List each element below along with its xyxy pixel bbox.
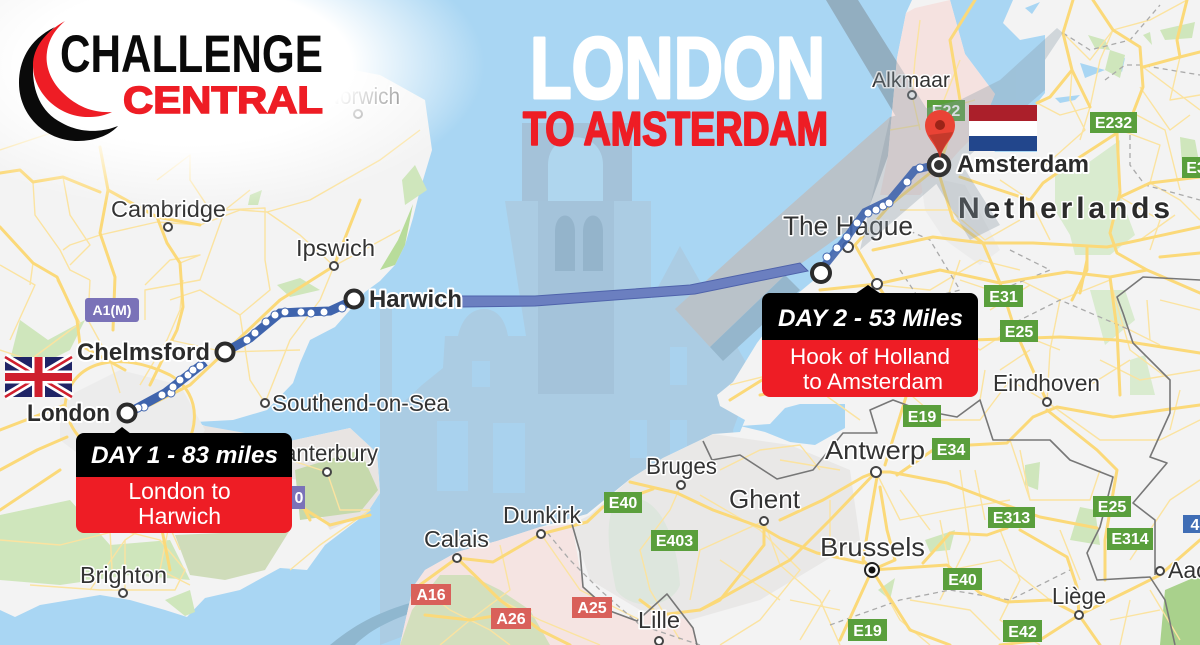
label Netherlands: Netherlands	[958, 192, 1170, 225]
label Antwerp: Antwerp	[825, 435, 925, 465]
shield purple cut: 0	[295, 490, 304, 507]
icon: UK flag	[5, 357, 72, 397]
label The Hague: The Hague	[783, 211, 913, 241]
map land: continent	[400, 0, 1200, 645]
shield E22: E22	[932, 103, 960, 120]
watermark: windmill sails tint over land	[826, 0, 1063, 250]
shield E19 north: E19	[908, 409, 936, 426]
route: day 1 cycling route	[130, 300, 354, 412]
label Brussels: Brussels	[820, 532, 925, 562]
shield A16: A16	[416, 587, 446, 604]
waypoint Hook of Holland	[812, 264, 830, 282]
waypoint Amsterdam: Amsterdam	[957, 151, 1089, 178]
shield E25 east	[1093, 496, 1131, 517]
map tints: pink France, pink North Holland, green grey Flanders	[60, 0, 1000, 645]
callout: day 2	[762, 285, 978, 397]
shield E31: E31	[989, 289, 1018, 306]
shield A1(M): A1(M)	[93, 302, 131, 318]
shield blue cut	[1183, 515, 1200, 534]
shield A16	[411, 584, 451, 605]
callout: day 2: to Amsterdam	[803, 369, 943, 394]
label Lille: Lille	[638, 607, 680, 633]
title: TO AMSTERDAM	[523, 102, 828, 155]
callout: day 2: DAY 2 - 53 Miles	[778, 305, 963, 332]
shield E40 east	[943, 568, 982, 590]
shield E403	[651, 530, 698, 551]
shield E19 south	[848, 619, 887, 641]
shield E313	[988, 507, 1035, 528]
logo: Challenge Central	[19, 21, 323, 141]
waypoint Chelmsford: Chelmsford	[77, 339, 210, 366]
shield E314	[1107, 528, 1153, 550]
label Norwich	[325, 83, 400, 118]
label Rotterdam marker	[872, 279, 882, 289]
logo wordmark central: CENTRAL	[123, 80, 323, 122]
title	[523, 20, 828, 155]
label Eindhoven: Eindhoven	[993, 370, 1100, 396]
shield E31	[984, 285, 1023, 307]
route: day 2 cycling route	[820, 164, 935, 271]
logo wordmark challenge: CHALLENGE	[60, 25, 323, 84]
shield E25: E25	[1005, 324, 1033, 341]
label Calais: Calais	[424, 526, 489, 552]
shield E403: E403	[656, 533, 693, 550]
shield A25: A25	[577, 600, 607, 617]
label Ghent: Ghent	[729, 484, 801, 514]
label Cambridge: Cambridge	[111, 196, 226, 222]
shield E22	[927, 100, 965, 121]
label Southend-on-Sea: Southend-on-Sea	[272, 390, 449, 416]
route: ferry crossing Harwich to Hook of Holland	[462, 263, 808, 307]
icon: red map pin	[925, 110, 955, 158]
shield E40 east: E40	[948, 572, 977, 589]
shield E25 east: E25	[1098, 499, 1126, 516]
label Lille	[638, 607, 680, 645]
logo black crescent	[19, 27, 118, 141]
shield E19 north	[903, 405, 941, 427]
shield E40 west: E40	[609, 495, 637, 512]
watermark: Amsterdam skyline silhouette	[330, 123, 753, 645]
shield A26: A26	[496, 611, 526, 628]
logo red crescent	[33, 21, 112, 117]
shield A25	[572, 597, 612, 618]
map: inland water (IJsselmeer and estuaries)	[740, 0, 1125, 445]
callout: day 1: Harwich	[138, 503, 221, 529]
shield E40 west	[604, 492, 642, 513]
shield E314: E314	[1111, 531, 1149, 548]
shield E34	[932, 438, 970, 460]
label Brighton: Brighton	[80, 562, 167, 588]
callout: day 2: Hook of Holland	[790, 344, 950, 369]
watermark: windmill sails over sea	[675, 0, 1063, 361]
map: national borders	[572, 277, 1200, 645]
shield E42	[1003, 620, 1042, 642]
shield A26	[491, 608, 531, 629]
shield A1(M)	[85, 298, 139, 322]
title: LONDON	[530, 20, 825, 117]
label Alkmaar: Alkmaar	[872, 69, 950, 92]
road shields	[85, 100, 1200, 642]
callout: day 1: DAY 1 - 83 miles	[91, 442, 278, 469]
shield E3 cut	[1182, 157, 1200, 178]
shield purple cut	[292, 486, 305, 509]
shield blue cut: 4	[1191, 517, 1200, 534]
label Liege: Liège	[1052, 583, 1106, 609]
callout: day 1: London to	[128, 478, 231, 504]
shield E34: E34	[937, 442, 965, 459]
label Ipswich: Ipswich	[296, 235, 375, 261]
map land: England	[0, 0, 432, 617]
label Canterbury: Canterbury	[268, 440, 378, 466]
shield E313: E313	[993, 510, 1030, 527]
label Brussels	[820, 532, 925, 577]
shield E232: E232	[1095, 115, 1132, 132]
waypoints and bold city labels	[27, 151, 1089, 427]
shield E42: E42	[1008, 624, 1037, 641]
label Antwerp	[825, 435, 925, 477]
shield E19 south: E19	[853, 623, 882, 640]
waypoint London: London	[27, 400, 110, 427]
waypoint Harwich: Harwich	[369, 286, 462, 313]
label Norwich: Norwich	[325, 83, 400, 109]
white glow behind logo	[0, 0, 485, 210]
label Bruges: Bruges	[646, 453, 717, 479]
shield E232	[1090, 112, 1137, 133]
callout: day 1	[76, 427, 292, 533]
shield E25	[1000, 320, 1038, 342]
icon: Netherlands flag	[969, 105, 1037, 151]
label Dunkirk: Dunkirk	[503, 502, 581, 528]
map: dashed provincial borders	[545, 5, 1200, 645]
